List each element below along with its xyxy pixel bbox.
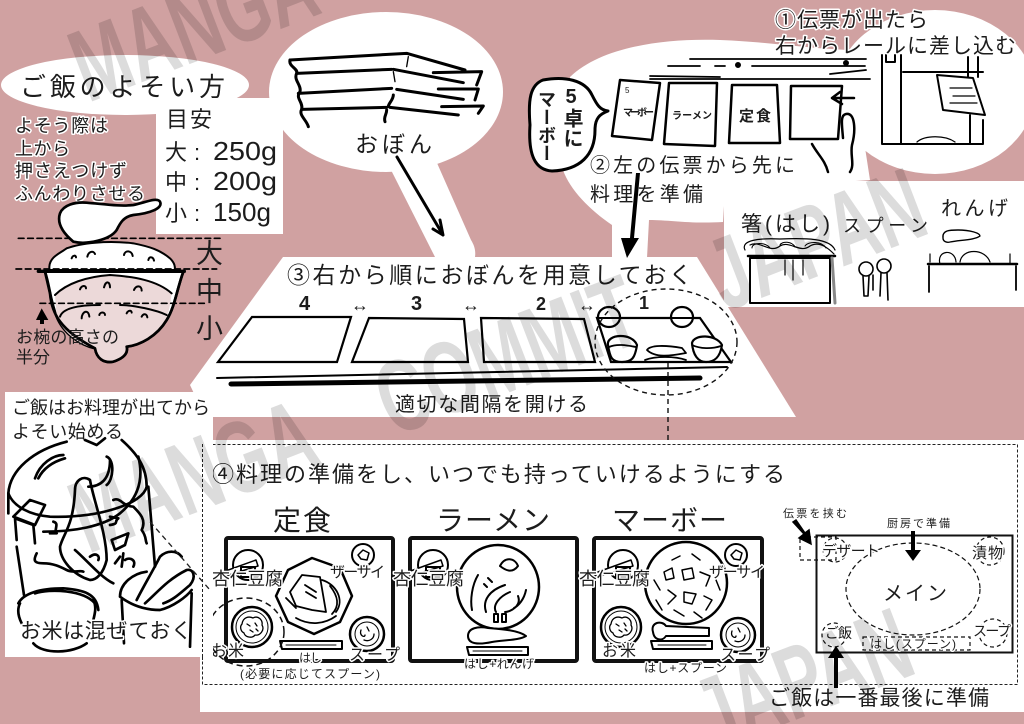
rice bowl illustration <box>16 200 220 362</box>
meal set: mabo: 杏仁豆腐 <box>579 569 650 589</box>
panel: step 4 meal preparation <box>200 440 1024 712</box>
panel: cutlery: 箸(はし) <box>741 213 830 236</box>
panel: rice cooker: よそい始める <box>12 422 123 442</box>
panel: rice ladling guide <box>1 55 283 367</box>
spacing arrows: ↔ <box>462 295 480 315</box>
panel: step 3 tray setup <box>190 257 796 444</box>
panel: ticket rail bubble <box>529 9 1024 258</box>
arrow: slip holder <box>793 520 811 544</box>
spacing arrows: ↔ <box>351 295 369 315</box>
meal set: mabo: ザーサイ <box>709 564 765 581</box>
text: step 1: ①伝票が出たら <box>775 9 928 32</box>
text: step 2: ②左の伝票から先に <box>590 154 795 177</box>
tip text: ふんわりさせる <box>15 184 145 204</box>
panel: step 3 tray setup: ③右から順におぼんを用意しておく <box>287 262 692 288</box>
watermarks: JAPAN <box>692 146 940 333</box>
panel: rice cooker: お米は混ぜておく <box>20 620 192 643</box>
icon: ticket slot machine <box>882 55 985 144</box>
meal set: teishoku: ザーサイ <box>330 564 385 581</box>
text: step 2: 料理を準備 <box>590 183 703 206</box>
arrow: to tray setup <box>397 157 443 235</box>
icon: chopstick box <box>744 239 835 303</box>
diagram: tray layout: 漬物 <box>972 545 1003 562</box>
meal set: teishoku <box>208 505 400 681</box>
icon: hand and arrow <box>812 92 854 172</box>
panel: step 3 tray setup: 適切な間隔を開ける <box>395 393 588 416</box>
portion guide <box>156 98 283 234</box>
portion guide: : <box>194 201 200 226</box>
arrow: rice last <box>828 646 844 688</box>
meal set: teishoku: スープ <box>349 646 400 664</box>
meal set: mabo: お米 <box>602 642 636 660</box>
portion guide: : <box>194 140 200 165</box>
icon: stacked trays <box>290 53 483 127</box>
tray 1 with dishes <box>597 293 731 362</box>
tickets: ラーメン <box>672 110 712 122</box>
portion guide: 目安 <box>166 107 212 132</box>
panel: rice cooker: ご飯はお料理が出てから <box>12 398 210 418</box>
panel: cutlery <box>724 181 1024 307</box>
diagram: tray layout: デザート <box>822 542 880 560</box>
tickets: 定食 <box>739 107 771 125</box>
panel: tray stack bubble <box>269 12 503 257</box>
tray 4: 4 <box>299 293 311 315</box>
tray 2: 2 <box>536 294 546 314</box>
icon: spoons <box>859 259 891 300</box>
meal set: mabo: マーボー <box>612 505 727 536</box>
bowl note <box>16 328 119 367</box>
tip text <box>15 116 145 204</box>
size labels: 大 <box>196 239 223 269</box>
icon: renge box <box>928 230 1017 292</box>
panel: rice cooker <box>5 392 213 660</box>
tip text: よそう際は <box>15 116 108 136</box>
meal set: teishoku: 杏仁豆腐 <box>212 569 283 589</box>
portion guide: 200g <box>213 166 277 196</box>
arrow: to tray 1 <box>621 173 640 258</box>
arrow: kitchen prep <box>905 531 921 561</box>
tray 4 <box>218 293 351 362</box>
text: step 1 <box>775 9 1016 58</box>
text: step 2 <box>590 154 795 206</box>
speech bubble: table order: 5卓に <box>560 86 583 148</box>
title: ご飯のよそい方 <box>20 72 225 102</box>
meal set: ramen: 杏仁豆腐 <box>393 569 464 589</box>
tip text: 押さえつけず <box>15 161 127 181</box>
panel: cutlery: スプーン <box>843 216 928 236</box>
bowl note: お椀の高さの <box>16 328 119 347</box>
portion guide: 小 <box>165 201 187 226</box>
diagram: tray layout: 厨房で準備 <box>887 516 950 530</box>
tray 3 <box>352 293 468 362</box>
portion guide: 150g <box>213 197 271 227</box>
tray 2 <box>481 294 595 362</box>
diagram: tray layout: はし(スプーン) <box>870 637 956 651</box>
watermarks: COMMIT <box>360 253 654 458</box>
diagram: tray layout <box>769 506 1012 710</box>
bowl note: 半分 <box>16 348 50 367</box>
portion guide: 250g <box>213 136 277 166</box>
diagram: tray layout: 伝票を挟む <box>783 506 847 520</box>
portion guide: 大 <box>165 140 187 165</box>
meal set: ramen: ラーメン <box>436 505 550 536</box>
text: rice last: ご飯は一番最後に準備 <box>769 687 989 710</box>
meal set: mabo <box>579 505 770 675</box>
speech bubble: table order: マーボー <box>536 90 556 162</box>
portion guide: 中 <box>165 170 187 195</box>
meal set: teishoku: はし <box>299 651 322 665</box>
text: step 1: 右からレールに差し込む <box>775 35 1016 58</box>
title <box>1 55 249 115</box>
ticket rail <box>650 59 870 79</box>
tip text: 上から <box>15 139 70 159</box>
meal set: mabo: はし+スプーン <box>644 661 727 675</box>
spacing arrows: ↔ <box>578 295 596 315</box>
diagram: tray layout: メイン <box>883 583 947 605</box>
step 4 heading: ④料理の準備をし、いつでも持っていけるようにする <box>212 462 785 487</box>
speech bubble: table order <box>529 79 608 171</box>
spacing arrows <box>351 295 596 315</box>
tickets: 5 <box>625 86 630 95</box>
meal set: teishoku: 定食 <box>273 505 331 536</box>
watermarks: MANGA <box>55 377 332 575</box>
tickets <box>612 80 842 146</box>
portion guide: : <box>194 170 200 195</box>
icon: rice cooker and paddle <box>8 438 210 651</box>
tray 1 with dishes: 1 <box>639 293 649 313</box>
size labels: 中 <box>196 277 223 307</box>
meal set: ramen: はし+れんげ <box>464 657 534 671</box>
size labels <box>196 239 223 344</box>
meal set: teishoku: (必要に応じてスプーン) <box>240 667 380 681</box>
tray 3: 3 <box>411 293 422 315</box>
panel: cutlery: れんげ <box>941 197 1008 220</box>
panel: tray stack bubble: おぼん <box>355 131 432 157</box>
diagram: tray layout: ご飯 <box>825 625 852 641</box>
meal set: ramen <box>393 505 577 671</box>
counter lines <box>217 367 727 384</box>
tickets: マーボー <box>623 107 654 119</box>
size labels: 小 <box>196 314 223 344</box>
meal set: teishoku: お米 <box>211 642 244 660</box>
meal set: mabo: スープ <box>720 646 770 664</box>
diagram: tray layout: スープ <box>973 623 1011 639</box>
